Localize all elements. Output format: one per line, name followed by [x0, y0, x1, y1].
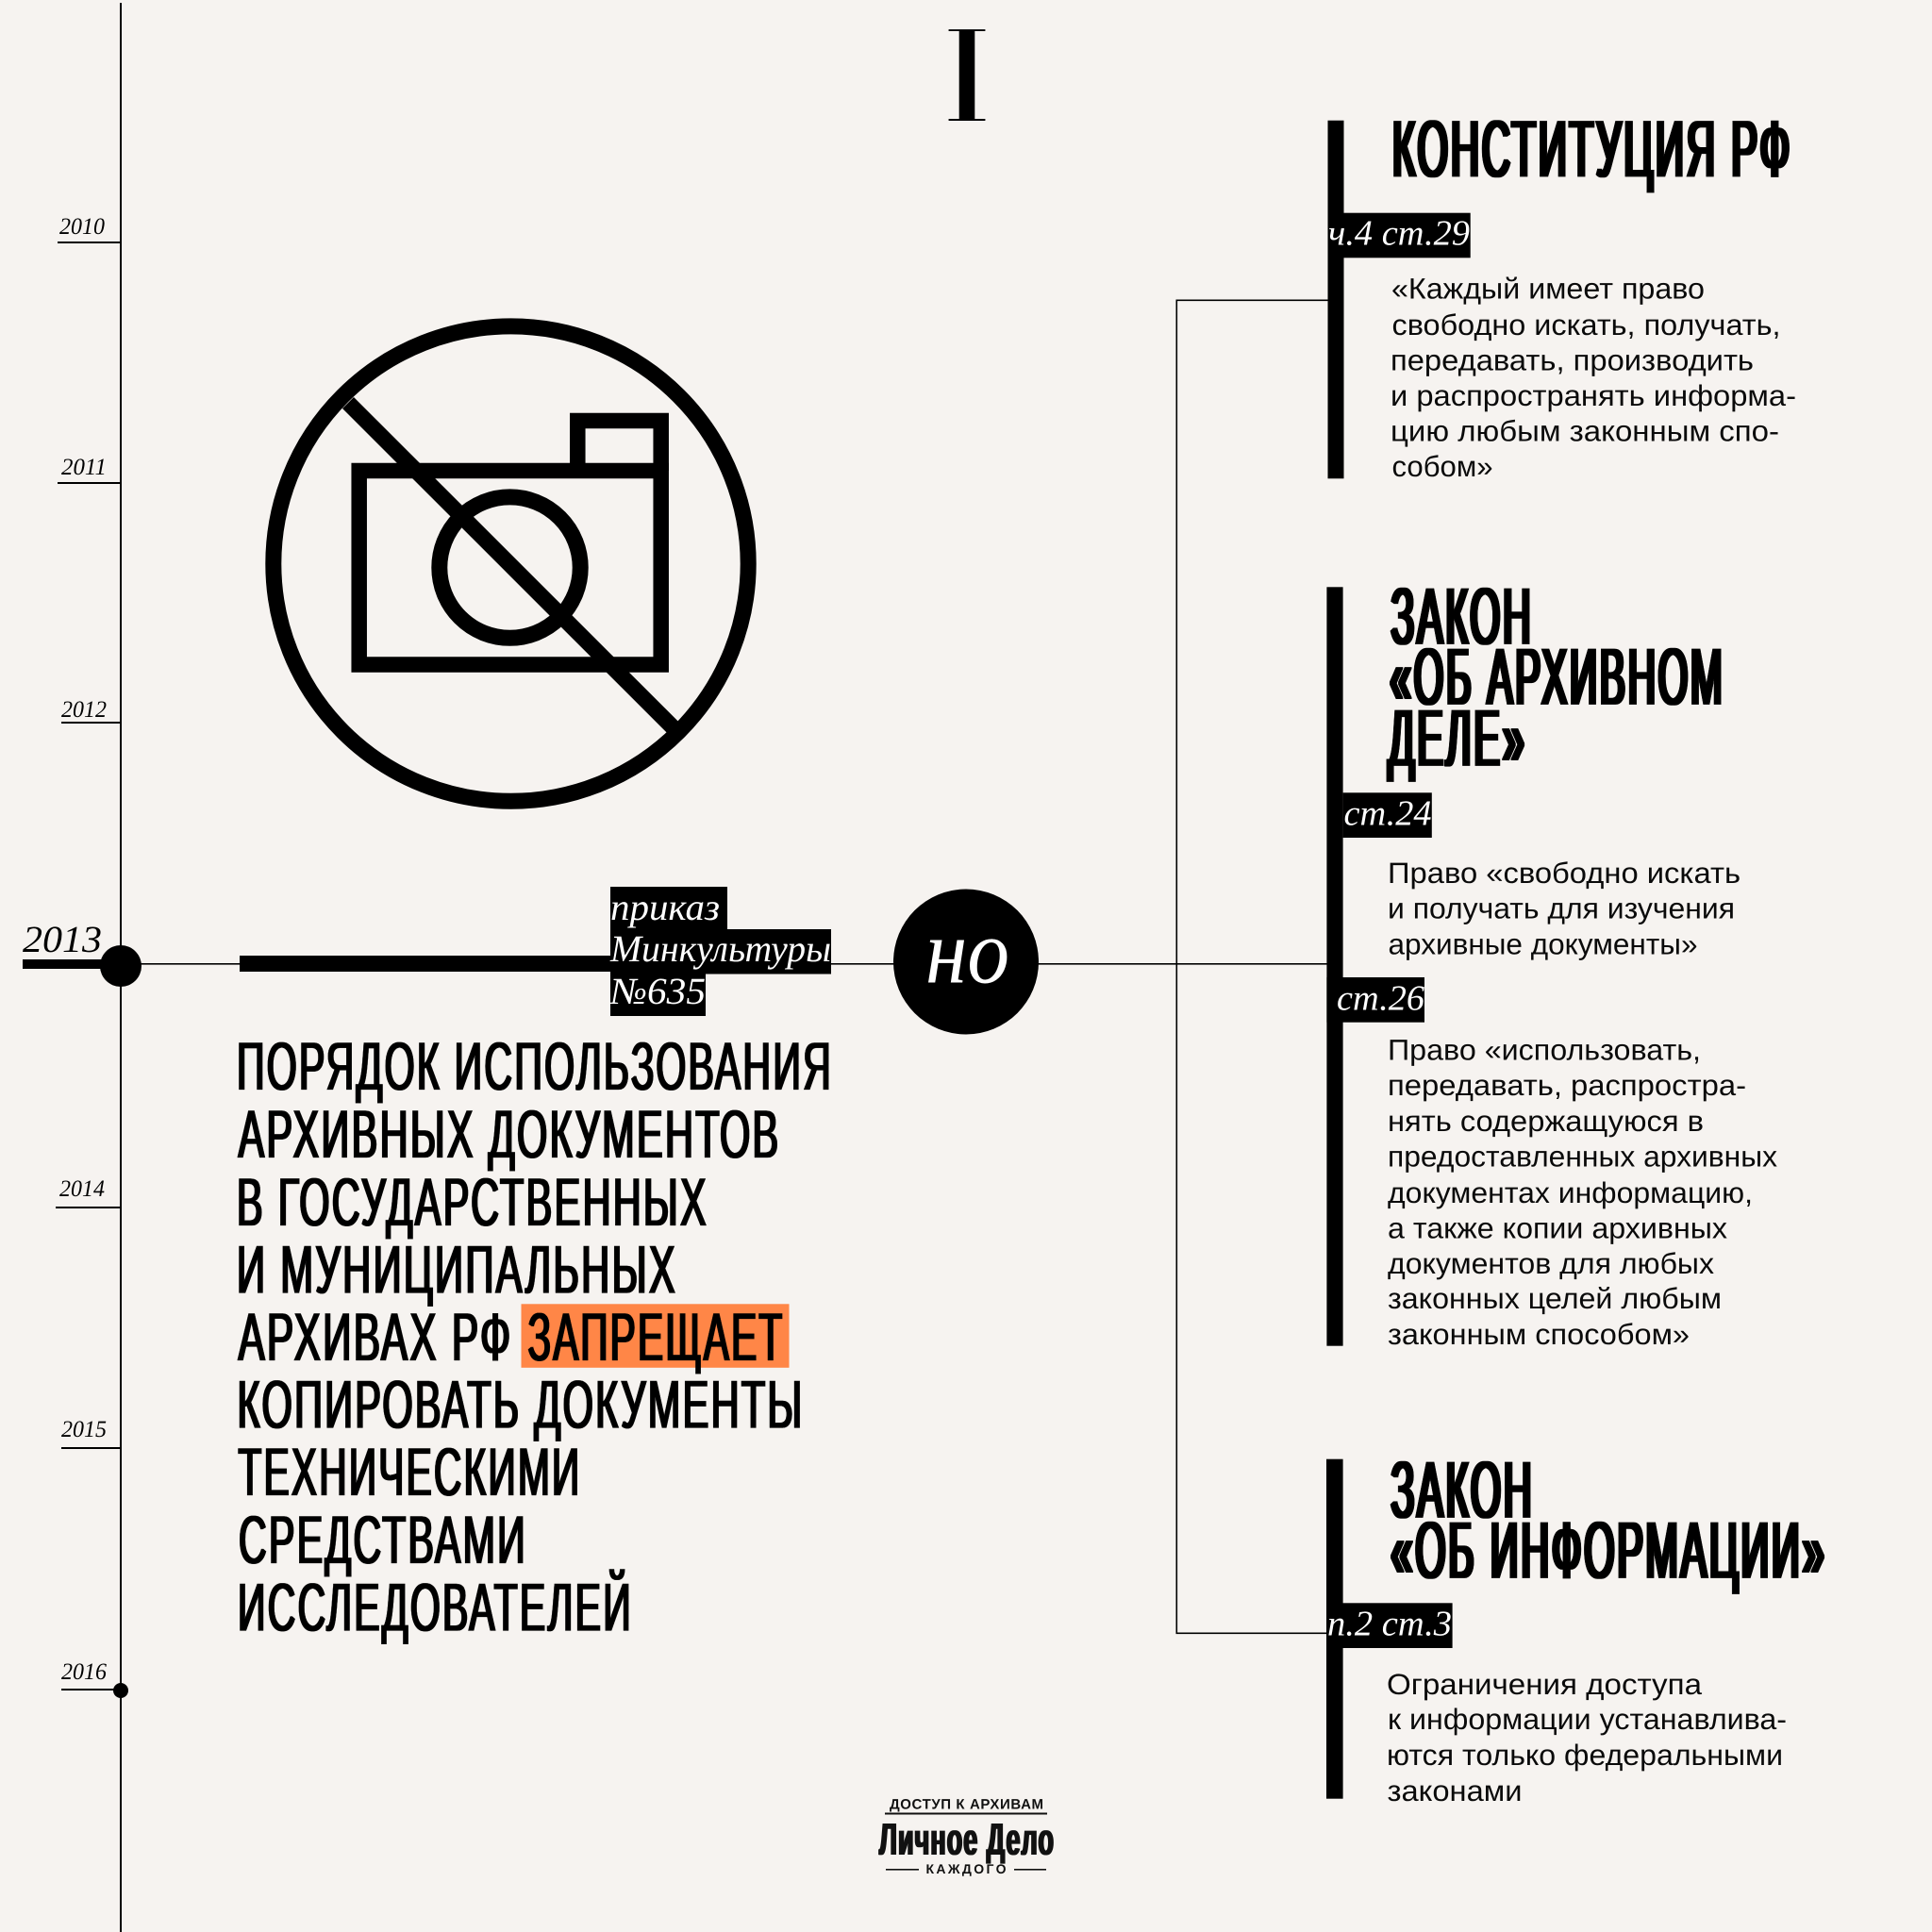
year 2015: 2015 — [61, 1417, 107, 1442]
logo: ДОСТУП К АРХИВАМ — [890, 1796, 1043, 1812]
year 2016 — [61, 1659, 128, 1698]
label: order of the Ministry of Culture: №635 — [608, 970, 706, 1012]
year 2016: 2016 — [61, 1659, 107, 1685]
year 2015 — [61, 1417, 121, 1449]
year 2011: 2011 — [61, 455, 107, 480]
heading: Archive law: ЗАКОН — [1391, 573, 1534, 662]
statement lines — [237, 1029, 833, 1645]
label: order of the Ministry of Culture: приказ — [610, 886, 720, 928]
circle: but: но — [925, 902, 1009, 1004]
text: access restrictions: законами — [1387, 1774, 1523, 1807]
label: order of the Ministry of Culture: Минкультуры — [609, 927, 831, 970]
statement lines: ЗАПРЕЩАЕТ — [528, 1300, 785, 1375]
year 2012: 2012 — [61, 697, 107, 723]
panel: Archive law — [1326, 573, 1778, 1351]
statement lines: АРХИВАХ РФ — [238, 1300, 513, 1375]
year 2013 marker — [23, 918, 142, 987]
quote text: свободно искать, получать, — [1392, 308, 1781, 341]
logo: КАЖДОГО — [926, 1861, 1007, 1876]
heading: Information law — [1391, 1445, 1826, 1596]
circle: but — [893, 889, 1039, 1034]
text: art. 26: передавать, распростра- — [1388, 1069, 1746, 1102]
statement lines: ТЕХНИЧЕСКИМИ — [238, 1435, 581, 1510]
text: access restrictions: Ограничения доступа — [1387, 1668, 1703, 1701]
statement lines: И МУНИЦИПАЛЬНЫХ — [237, 1232, 677, 1307]
roman numeral: I — [945, 0, 989, 152]
text: access restrictions: ются только федеральными — [1387, 1739, 1783, 1772]
thick order bar — [240, 956, 610, 972]
text: art. 24 — [1388, 857, 1740, 961]
statement lines: ПОРЯДОК ИСПОЛЬЗОВАНИЯ — [237, 1029, 833, 1105]
text: art. 26: а также копии архивных — [1388, 1212, 1728, 1245]
quote text: передавать, производить — [1391, 344, 1754, 377]
label: art. 26: ст.26 — [1337, 978, 1424, 1018]
text: art. 24: архивные документы» — [1389, 928, 1698, 961]
year 2010: 2010 — [59, 214, 105, 240]
year 2014 — [56, 1176, 121, 1208]
text: art. 26: нять содержащуюся в — [1388, 1105, 1704, 1138]
statement lines: СРЕДСТВАМИ — [239, 1503, 527, 1578]
panel: Information law — [1326, 1445, 1826, 1807]
panel: Constitution — [1328, 105, 1796, 483]
quote text — [1391, 273, 1796, 483]
statement lines: ИССЛЕДОВАТЕЛЕЙ — [238, 1568, 633, 1645]
text: art. 26: документах информацию, — [1388, 1176, 1753, 1209]
text: art. 26: Право «использовать, — [1388, 1033, 1701, 1066]
quote text: «Каждый имеет право — [1391, 273, 1705, 306]
text: access restrictions: к информации устанавлива- — [1388, 1703, 1787, 1736]
icon: crossed-out camera — [274, 326, 748, 801]
label: order of the Ministry of Culture — [608, 886, 831, 1016]
label: art. 29: ч.4 ст.29 — [1328, 213, 1470, 253]
statement lines: КОПИРОВАТЬ ДОКУМЕНТЫ — [238, 1368, 804, 1443]
heading: Information law: ЗАКОН — [1391, 1445, 1534, 1535]
label: p. 2 art. 3: п.2 ст.3 — [1327, 1605, 1452, 1644]
text: access restrictions — [1387, 1668, 1787, 1807]
highlight: forbids — [521, 1304, 789, 1368]
text: art. 24: и получать для изучения — [1388, 892, 1735, 925]
logo — [879, 1796, 1055, 1876]
text: art. 26: законным способом» — [1388, 1318, 1690, 1351]
main statement — [237, 1029, 833, 1645]
heading: Archive law: ДЕЛЕ» — [1389, 694, 1526, 784]
year 2011 — [58, 455, 121, 484]
timeline — [23, 3, 142, 1932]
heading: Archive law — [1389, 573, 1724, 784]
logo: Личное Дело — [879, 1815, 1055, 1865]
statement lines: В ГОСУДАРСТВЕННЫХ — [237, 1165, 708, 1241]
text: art. 26: законных целей любым — [1388, 1282, 1722, 1315]
year 2014: 2014 — [59, 1176, 105, 1202]
text: art. 26: документов для любых — [1388, 1247, 1715, 1280]
year 2013 marker: 2013 — [23, 918, 102, 960]
quote text: собом» — [1392, 450, 1492, 483]
quote text: и распространять информа- — [1391, 379, 1796, 412]
text: art. 26 — [1388, 1033, 1778, 1351]
text: art. 24: Право «свободно искать — [1388, 857, 1740, 890]
quote text: цию любым законным спо- — [1391, 415, 1779, 448]
text: art. 26: предоставленных архивных — [1388, 1141, 1778, 1174]
connector lines — [121, 300, 1330, 1634]
label: art. 24: ст.24 — [1343, 794, 1432, 834]
year 2010 — [58, 214, 121, 243]
statement lines: АРХИВНЫХ ДОКУМЕНТОВ — [238, 1097, 781, 1173]
